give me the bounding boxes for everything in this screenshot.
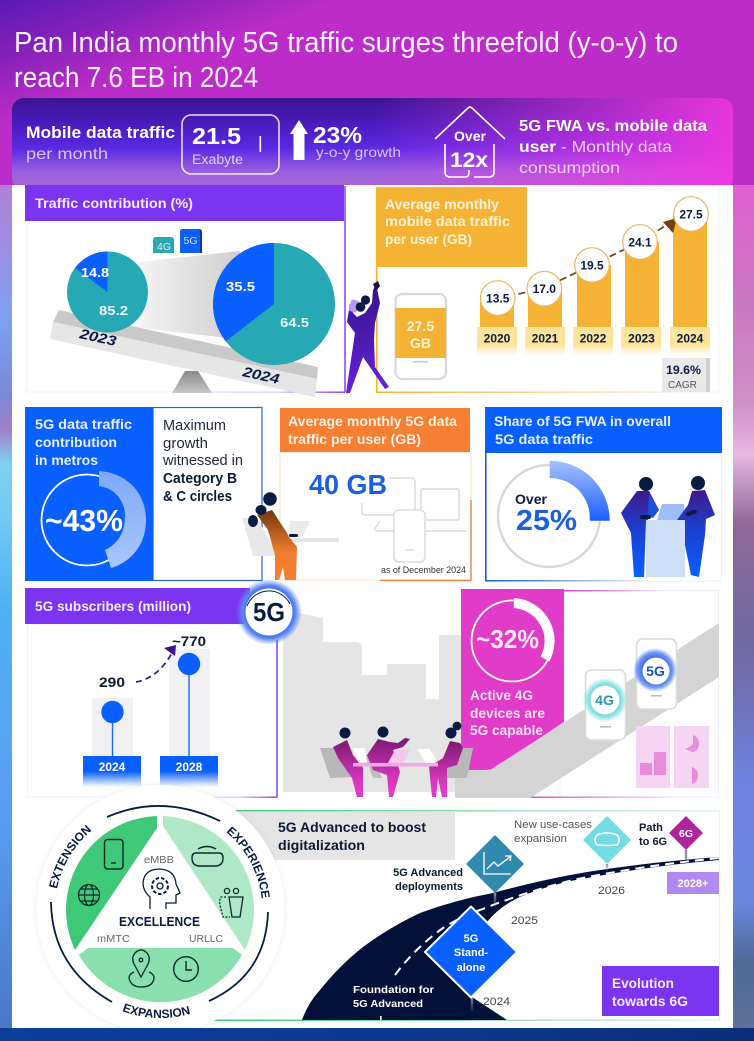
value box: 21.5 Exabyte: Exabyte xyxy=(192,152,243,167)
bar chart: yearly traffic: 17.0 xyxy=(533,282,556,296)
circular labels: EXPERIENCE xyxy=(226,826,270,898)
icon: phone 27.5 GB: GB xyxy=(410,335,431,351)
value: 40 GB: 40 GB xyxy=(309,469,387,500)
icon: devices outline xyxy=(362,478,467,562)
milestone: 5G Advanced deployments 2025: deployments xyxy=(395,881,463,893)
heading xyxy=(25,588,250,624)
donut: 32 percent: ~32% xyxy=(476,624,539,654)
heading: per user (GB) xyxy=(385,231,472,247)
icon: 4G phone: 4G xyxy=(595,692,614,708)
heading: Average monthly xyxy=(385,196,499,212)
badge: 5G: 5G xyxy=(253,597,285,627)
pie chart: 2024: 64.5 xyxy=(280,315,309,330)
heading: 5G subscribers (million) xyxy=(35,598,191,614)
mobile data traffic label: Mobile data traffic xyxy=(26,124,175,142)
icon: people xyxy=(220,888,243,917)
milestone: 5G Advanced deployments 2025 xyxy=(393,835,538,927)
text: active 4G devices: devices are xyxy=(470,705,545,721)
background band: bottom xyxy=(0,1028,754,1041)
tag: 2028+ xyxy=(667,872,719,894)
milestone: 5G standalone 2024: 2024 xyxy=(483,996,510,1008)
circular labels xyxy=(49,824,270,1018)
CAGR tag: 19.6% xyxy=(666,363,701,377)
bar chart: yearly traffic xyxy=(477,197,710,355)
figure: two people at desk xyxy=(621,476,715,577)
diagram: excellence circle xyxy=(35,784,286,1028)
center labels: eMBB xyxy=(144,854,174,866)
sector: extension xyxy=(66,816,157,950)
sector: experience xyxy=(163,816,254,950)
heading xyxy=(25,185,344,221)
title xyxy=(14,27,678,94)
heading: contribution xyxy=(35,434,117,450)
heading: Share of 5G FWA in overall xyxy=(494,413,671,429)
value box: 21.5 Exabyte: 21.5 xyxy=(192,123,241,149)
figure: woman at laptop xyxy=(242,492,339,580)
donut: over 25 percent: Over xyxy=(515,491,548,507)
callout: evolution towards 6G: Evolution xyxy=(612,975,674,991)
center labels: URLLC xyxy=(189,933,223,945)
milestone: path to 6G: to 6G xyxy=(639,836,667,848)
icon: clock xyxy=(174,957,198,981)
mobile data traffic label: per month xyxy=(26,146,108,163)
bar chart: yearly traffic: 2021 xyxy=(532,332,559,346)
milestone: new use-cases 2026 xyxy=(514,816,631,897)
heading: 5G data traffic xyxy=(495,431,593,447)
CAGR tag xyxy=(662,358,710,392)
bar chart: yearly traffic: 2024 xyxy=(677,332,704,346)
icon: VR goggles xyxy=(192,846,223,866)
callout: evolution towards 6G: towards 6G xyxy=(612,993,688,1009)
heading: Average monthly 5G data xyxy=(288,413,457,429)
lollipop chart: 2024 xyxy=(99,760,126,774)
heading: traffic per user (GB) xyxy=(288,431,421,447)
badge: 5G xyxy=(236,579,302,645)
heading: digitalization xyxy=(278,837,365,853)
milestone: 5G standalone 2024: Stand- xyxy=(454,947,488,959)
icon: house with over 12x: 12x xyxy=(450,149,488,172)
heading: 5G Advanced to boost xyxy=(278,819,426,835)
center labels: mMTC xyxy=(97,933,130,945)
sector: expansion xyxy=(79,948,242,1002)
bar chart: yearly traffic: 13.5 xyxy=(486,292,510,306)
growth 23%: y-o-y growth xyxy=(316,144,401,160)
donut: 32 percent xyxy=(472,600,552,682)
donut: over 25 percent xyxy=(498,461,610,567)
text: category B and C: Category B xyxy=(163,471,237,487)
roadmap road xyxy=(302,857,719,1020)
text: foundation for 5G Advanced: 5G Advanced xyxy=(353,998,423,1010)
pink panel xyxy=(461,589,564,770)
panel: average monthly 5G data traffic xyxy=(280,408,471,581)
panel: traffic contribution xyxy=(25,185,345,397)
heading: Traffic contribution (%) xyxy=(35,195,193,211)
pie chart: 2024: 35.5 xyxy=(226,279,255,294)
bar chart: yearly traffic: 24.1 xyxy=(628,236,652,250)
white content panel xyxy=(12,185,733,1028)
illustration: meeting people xyxy=(320,722,473,797)
heading: 5G data traffic xyxy=(35,416,132,432)
legend: 4G and 5G: 4G xyxy=(157,241,171,253)
growth 23%: 23% xyxy=(313,122,362,148)
panel: share of 5G FWA xyxy=(485,407,722,582)
bar chart: yearly traffic: 27.5 xyxy=(679,208,703,222)
milestone: new use-cases 2026: expansion xyxy=(514,833,567,845)
milestone: 5G standalone 2024: 5G xyxy=(464,933,478,945)
caption: date: as of December 2024 xyxy=(381,565,466,576)
milestone: 5G standalone 2024: alone xyxy=(457,962,485,974)
icon: location pin xyxy=(129,950,154,987)
FWA vs mobile text xyxy=(519,118,707,177)
legend: 4G and 5G: 5G xyxy=(184,235,198,247)
pie chart: 2023: 14.8 xyxy=(81,265,109,280)
seesaw xyxy=(50,251,318,397)
tag: 2028+: 2028+ xyxy=(678,878,708,890)
heading: mobile data traffic xyxy=(385,213,510,229)
lollipop chart: 290 xyxy=(99,674,125,690)
legend: 4G and 5G xyxy=(153,229,202,253)
lollipop chart: 2028 xyxy=(176,760,203,774)
figure: person with phone xyxy=(346,281,389,393)
panel: header stats xyxy=(12,98,733,190)
illustration: diagonal road xyxy=(455,623,719,798)
text: foundation for 5G Advanced: Foundation for xyxy=(353,984,434,996)
outer arcs xyxy=(51,806,268,1002)
icon: house with over 12x xyxy=(435,107,505,177)
panel: average monthly mobile data traffic per user xyxy=(376,186,719,393)
heading: in metros xyxy=(35,452,98,468)
icon: house with over 12x: Over xyxy=(454,129,487,144)
FWA vs mobile text: 5G FWA vs. mobile data xyxy=(519,118,707,135)
CAGR tag: CAGR xyxy=(668,380,697,391)
mini charts xyxy=(636,726,709,788)
milestone: 5G standalone 2024 xyxy=(425,906,517,1012)
icon: 4G phone xyxy=(583,670,627,740)
heading xyxy=(230,812,455,860)
circular labels: EXPANSION xyxy=(122,1003,190,1018)
title: Pan India monthly 5G traffic surges threefold (y-o-y) to xyxy=(14,27,678,59)
text: active 4G devices: Active 4G xyxy=(470,687,533,703)
heading xyxy=(485,407,722,453)
icon: 5G phone xyxy=(633,639,677,709)
value box: 21.5 Exabyte xyxy=(182,115,279,174)
milestone: 5G Advanced deployments 2025: 5G Advanced xyxy=(393,867,463,879)
icon: globe xyxy=(78,884,100,906)
milestone: path to 6G xyxy=(639,816,703,860)
mobile data traffic label xyxy=(26,124,175,163)
icon: phone 27.5 GB: 27.5 xyxy=(407,318,434,334)
donut: 43 percent: ~43% xyxy=(45,503,123,538)
text: foundation for 5G Advanced xyxy=(353,984,434,1010)
seesaw: 2023 xyxy=(77,325,118,349)
panel: 5G subscribers xyxy=(25,588,278,798)
panel: evolution towards 6G xyxy=(205,810,720,1021)
icon: head with gear xyxy=(143,869,180,909)
donut: 43 percent xyxy=(42,471,146,568)
center labels xyxy=(97,854,223,945)
pie chart: 2023: 85.2 xyxy=(99,303,128,318)
icon: 5G phone: 5G xyxy=(646,663,665,679)
text: category B and C: & C circles xyxy=(163,489,232,505)
icon: phone 27.5 GB xyxy=(396,294,446,379)
growth 23% xyxy=(313,122,401,160)
donut: over 25 percent: 25% xyxy=(516,505,577,537)
milestone: new use-cases 2026: New use-cases xyxy=(514,819,593,831)
panel: 4G devices 5G capable xyxy=(455,589,719,798)
icon: phone xyxy=(104,840,123,869)
milestone: path to 6G: 6G xyxy=(679,828,693,840)
bar chart: yearly traffic: 2020 xyxy=(484,332,511,346)
heading xyxy=(35,416,132,468)
milestone: 5G Advanced deployments 2025: 2025 xyxy=(511,915,538,927)
text: category B and C: growth xyxy=(163,436,208,452)
milestone: path to 6G: Path xyxy=(639,822,663,834)
seesaw: 2024 xyxy=(240,363,281,387)
bar chart: yearly traffic: 2023 xyxy=(628,332,655,346)
text: active 4G devices: 5G capable xyxy=(470,722,543,738)
circular labels: EXTENSION xyxy=(49,824,92,888)
heading xyxy=(376,187,527,267)
center labels: EXCELLENCE xyxy=(119,914,200,929)
lollipop chart xyxy=(83,633,218,787)
icon: up arrow xyxy=(290,120,308,160)
FWA vs mobile text: consumption xyxy=(519,160,620,177)
callout: evolution towards 6G xyxy=(602,966,719,1016)
text: category B and C: Maximum xyxy=(163,418,226,434)
bar chart: yearly traffic: 2022 xyxy=(580,332,607,346)
pie chart: 2023 xyxy=(67,252,148,332)
bar chart: yearly traffic: 19.5 xyxy=(580,258,604,272)
text: category B and C xyxy=(162,418,243,505)
milestone: new use-cases 2026: 2026 xyxy=(598,885,625,897)
panel: 5G traffic in metros xyxy=(25,407,262,581)
heading xyxy=(280,408,470,452)
illustration: city silhouette xyxy=(283,610,465,792)
pie chart: 2024 xyxy=(213,243,335,365)
text: category B and C: witnessed in xyxy=(162,453,243,469)
FWA vs mobile text: user - Monthly data xyxy=(519,139,672,156)
lollipop chart: ~770 xyxy=(172,633,206,649)
title: reach 7.6 EB in 2024 xyxy=(14,62,258,94)
text: active 4G devices xyxy=(470,687,545,738)
